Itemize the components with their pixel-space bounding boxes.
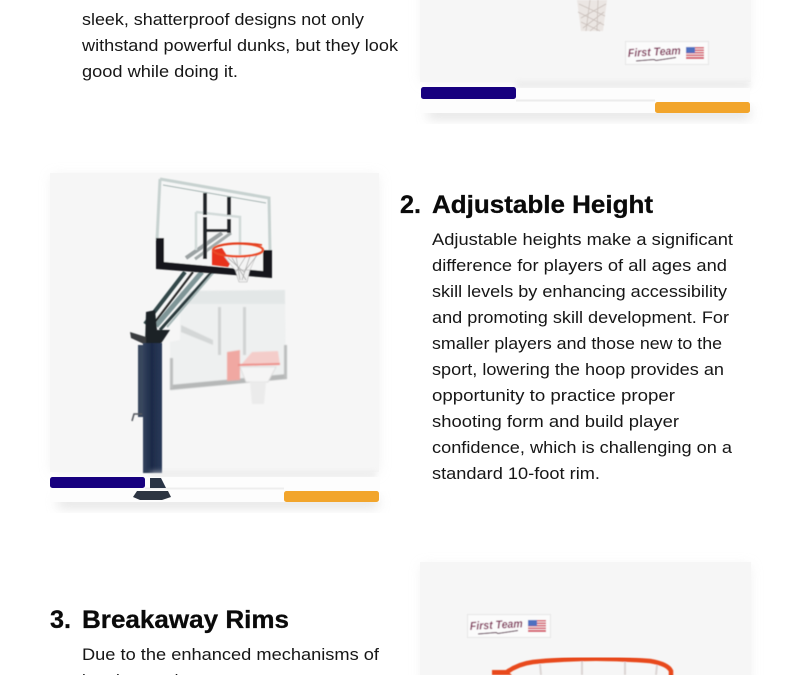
text block: adjustable height description: skill levels by enhancing accessibility <box>432 282 728 301</box>
text block: adjustable height description: opportunity to practice proper <box>432 386 675 405</box>
icon: orange rim <box>492 659 671 675</box>
icon: net of hoop <box>577 0 607 31</box>
icon: First Team badge <box>468 614 550 638</box>
heading: breakaway rims: Breakaway Rims <box>82 606 289 634</box>
text block: adjustable height description: Adjustable heights make a significant <box>432 230 733 249</box>
icon: pole and base <box>132 343 162 473</box>
heading: adjustable height: 2. <box>400 191 421 219</box>
text block: adjustable height description: sport, lowering the hoop provides an <box>432 360 724 379</box>
icon: First Team badge: First Team <box>628 45 681 60</box>
text block: breakaway rims description: Due to the enhanced mechanisms of <box>82 645 379 664</box>
panel: breakaway rim image <box>420 562 751 675</box>
text block: adjustable height description: difference for players of all ages and <box>432 256 727 275</box>
panel: adjustable height image <box>50 173 379 473</box>
icon: arms of the hoop <box>130 233 231 345</box>
text block: adjustable height description: shooting form and build player <box>432 412 679 431</box>
text block: feature 1 continued <box>81 10 399 81</box>
text block: feature 1 continued: sleek, shatterproof designs not only <box>82 10 365 29</box>
text block: adjustable height description: standard 10-foot rim. <box>432 464 600 483</box>
text block: adjustable height description: smaller players and those new to the <box>432 334 722 353</box>
text block: adjustable height description: and promoting skill development. For <box>432 308 729 327</box>
bar: orange accent top <box>655 102 750 113</box>
panel: backboard feature image <box>420 0 751 82</box>
bar: orange accent middle <box>284 491 379 502</box>
text block: adjustable height description: confidence, which is challenging on a <box>432 438 733 457</box>
icon: red rim and net <box>212 243 263 282</box>
text block: feature 1 continued: good while doing it. <box>82 62 238 81</box>
text block: feature 1 continued: withstand powerful dunks, but they look <box>81 36 399 55</box>
heading: breakaway rims: 3. <box>50 606 71 634</box>
icon: lowered ghost backboard <box>170 290 287 404</box>
icon: First Team badge <box>626 42 708 64</box>
icon: First Team badge: First Team <box>470 618 523 633</box>
text block: adjustable height description <box>432 230 733 483</box>
bar: navy accent top <box>420 82 750 118</box>
text block: breakaway rims description <box>82 645 379 675</box>
bar: navy accent middle <box>50 472 380 507</box>
icon: main backboard <box>156 179 272 278</box>
heading: adjustable height: Adjustable Height <box>432 191 654 219</box>
